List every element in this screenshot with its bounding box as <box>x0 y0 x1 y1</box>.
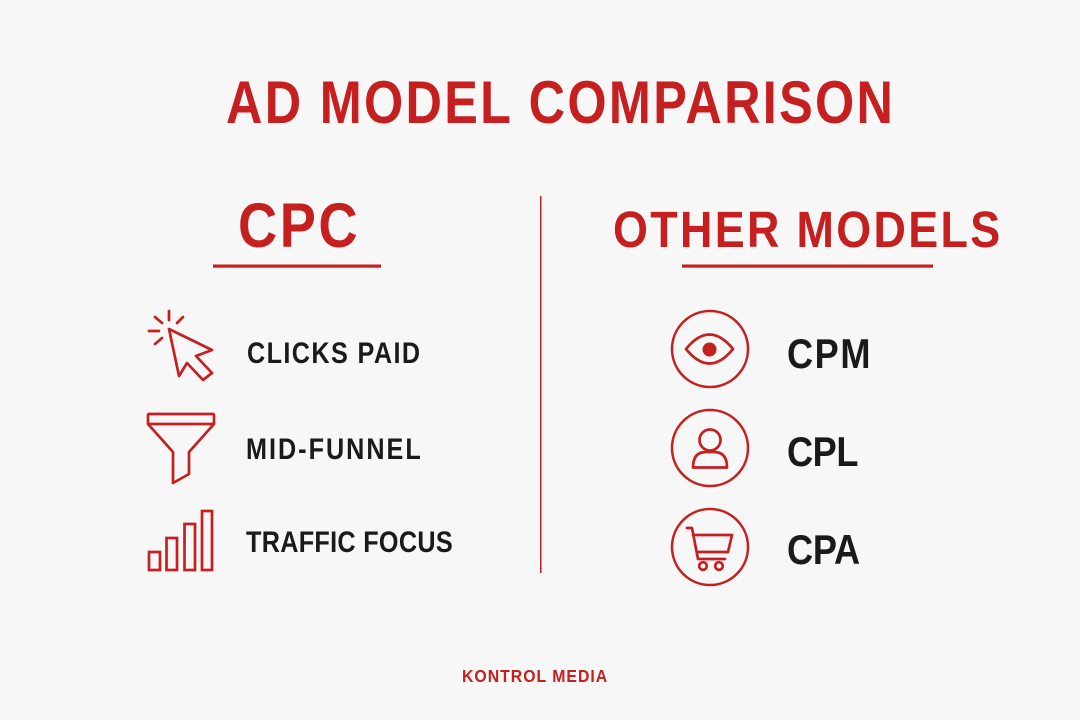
label: CPA: CPA <box>787 528 860 574</box>
heading: other models: OTHER MODELS <box>613 202 1000 259</box>
heading underline: CPC <box>213 264 381 268</box>
label: clicks paid: CLICKS PAID <box>247 336 420 369</box>
heading: CPC: CPC <box>238 191 358 261</box>
panel: CPC <box>148 191 453 570</box>
icon: person in circle <box>672 410 748 486</box>
divider <box>540 196 542 573</box>
icon: cart in circle <box>672 509 748 585</box>
icon: bar chart <box>149 511 212 570</box>
icon: eye in circle <box>672 311 748 387</box>
label: CPM: CPM <box>787 332 870 378</box>
icon: cursor click <box>149 311 212 380</box>
label: CPL: CPL <box>787 430 858 476</box>
heading underline: other models <box>682 264 933 268</box>
panel: other models <box>613 202 1000 585</box>
label: traffic focus: TRAFFIC FOCUS <box>246 525 453 558</box>
footer brand: KONTROL MEDIA <box>462 666 607 686</box>
title: AD MODEL COMPARISON <box>226 69 893 136</box>
label: mid-funnel: MID-FUNNEL <box>246 432 421 465</box>
icon: funnel <box>148 414 214 483</box>
